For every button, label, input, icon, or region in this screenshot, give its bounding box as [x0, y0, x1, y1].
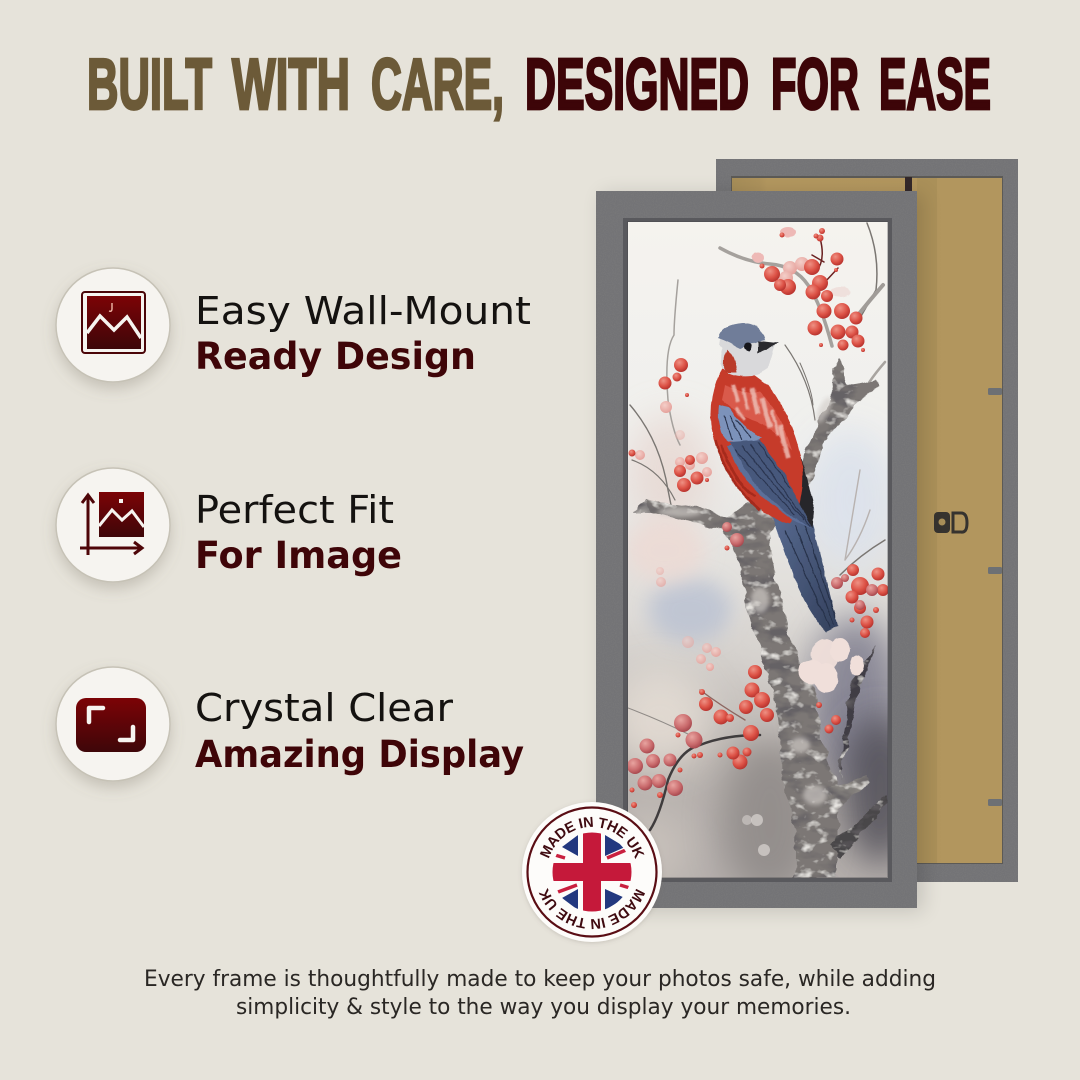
feature: easy wall-mount: [56, 268, 531, 382]
head: [719, 323, 775, 376]
icon badge: crystal clear: [56, 667, 170, 781]
heading: easy wall-mount: Easy Wall-Mount: [195, 289, 531, 333]
artwork: bird on branch: [628, 222, 888, 878]
blue wing: [718, 405, 812, 528]
title: DESIGNED: [525, 45, 749, 125]
flag: [552, 832, 632, 912]
thin twigs: [628, 223, 885, 830]
red body: [710, 368, 803, 524]
icon badge: wall-mount: [56, 268, 170, 382]
infographic canvas: [50, 56, 1018, 1018]
title: EASE: [879, 45, 991, 125]
footer text: Every frame is thoughtfully made to keep your photos safe, while adding: [144, 966, 936, 992]
icon badge: perfect fit: [56, 468, 170, 582]
subheading: ready design: Ready Design: [195, 335, 476, 378]
heading: perfect fit: Perfect Fit: [195, 488, 394, 532]
subheading: amazing display: Amazing Display: [195, 733, 524, 776]
badge text bottom: MADE IN THE UK: [538, 888, 645, 930]
watercolor washes: [628, 413, 888, 878]
title: FOR: [771, 45, 859, 125]
title: CARE,: [371, 45, 504, 125]
back of frame: [716, 159, 1018, 882]
inner lip shade: [628, 222, 888, 878]
title: BUILT: [87, 45, 212, 125]
pale berries: [635, 257, 809, 671]
red berries: [628, 228, 889, 808]
dusky berries: [627, 574, 878, 796]
front frame with art: [596, 191, 923, 911]
bird: [710, 323, 838, 632]
badge text top: MADE IN THE UK: [540, 816, 644, 859]
beak: [758, 341, 779, 354]
hanger clip: [934, 512, 967, 533]
tail: [772, 517, 838, 632]
made in the UK badge: [520, 802, 663, 944]
footer text: simplicity & style to the way you display your memories.: [236, 994, 851, 1020]
pale blossoms: [752, 227, 864, 693]
title: [87, 45, 991, 125]
subheading: for image: For Image: [195, 534, 402, 577]
feature: crystal clear: [56, 667, 524, 781]
heading: crystal clear: Crystal Clear: [195, 686, 453, 730]
feature: perfect fit: [56, 468, 402, 582]
footer text: [144, 966, 936, 1020]
tree trunk and branches: [633, 360, 888, 878]
title: WITH: [232, 45, 350, 125]
bark highlights: [658, 395, 834, 805]
